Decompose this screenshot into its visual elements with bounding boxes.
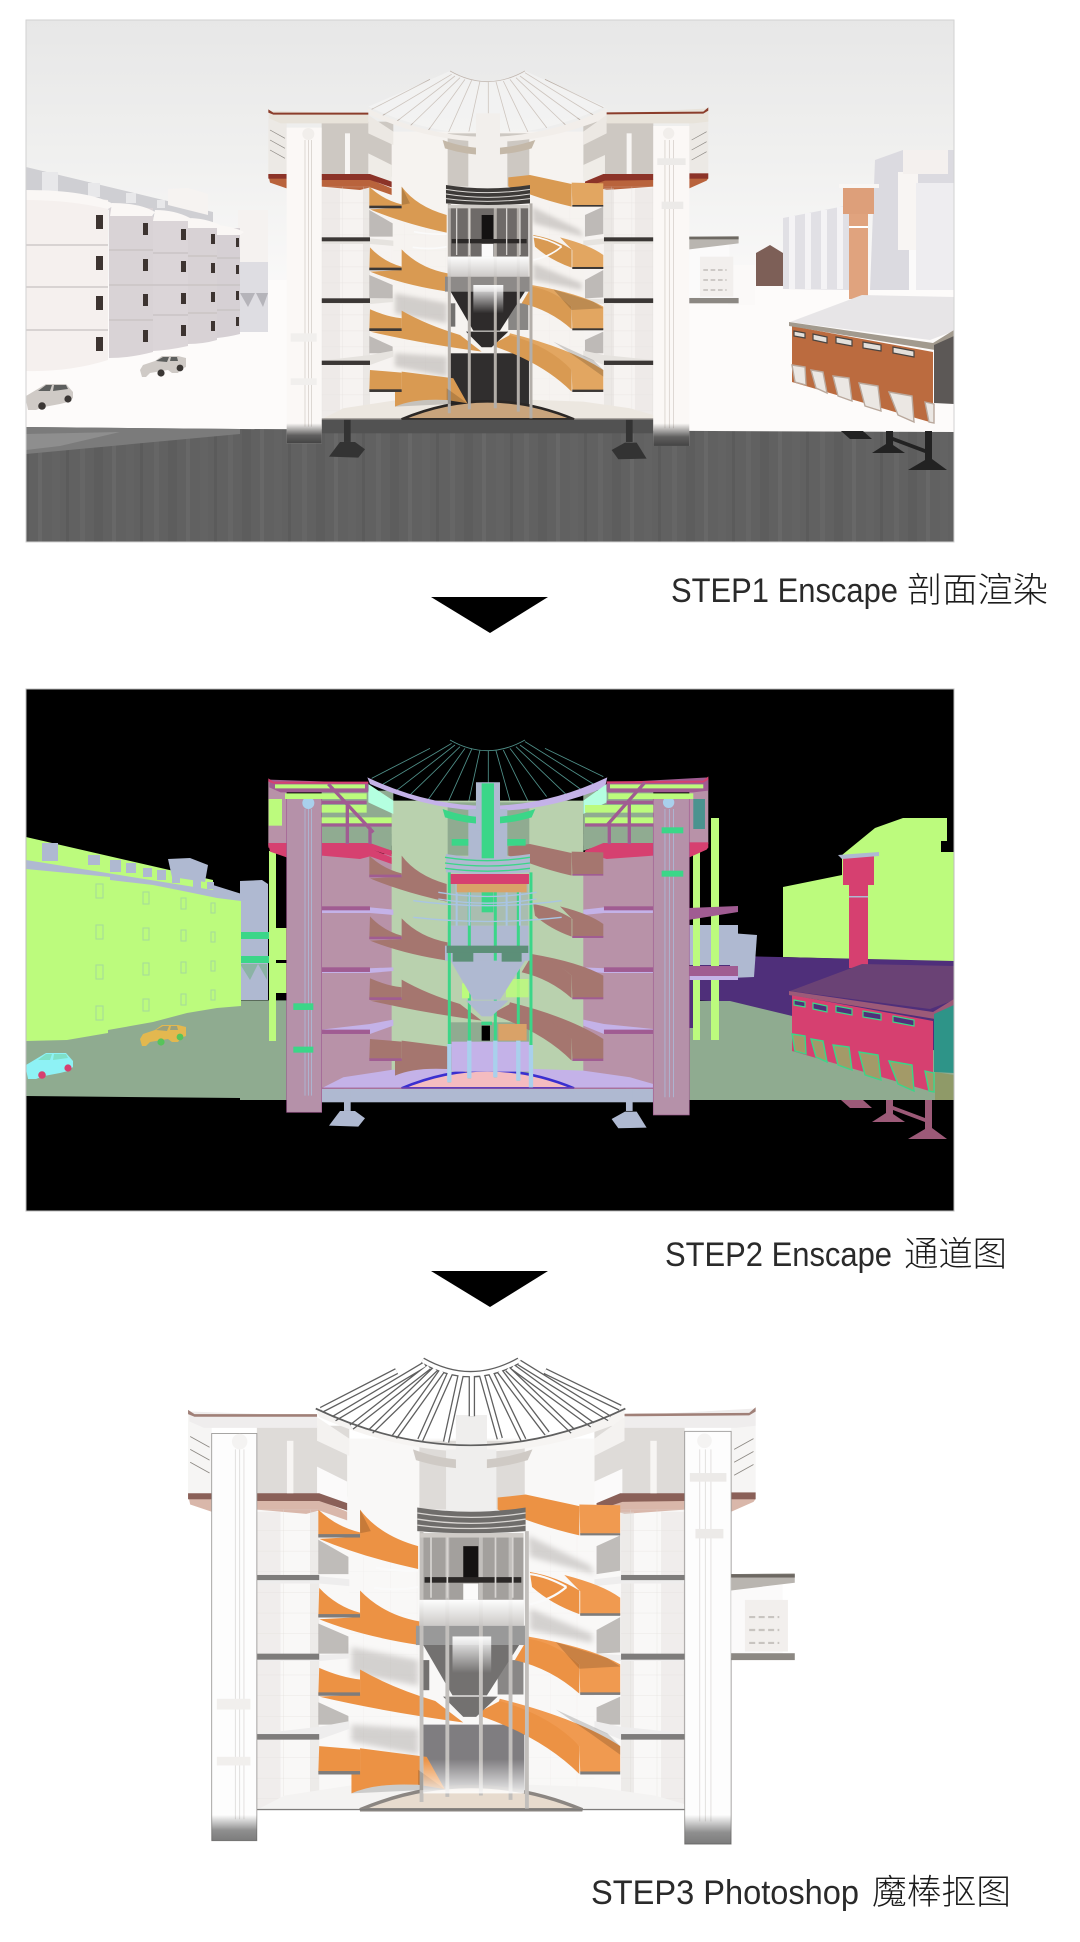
chimney [838, 852, 879, 968]
label: step 3: STEP3 Photoshop [591, 1874, 859, 1912]
main building channel map [268, 740, 708, 1128]
factory [789, 295, 954, 470]
label: step 3 [591, 1864, 1011, 1914]
panel border [26, 689, 954, 1211]
red band and hopper details [447, 874, 531, 1087]
label: step 2 [665, 1226, 1007, 1276]
panel: step 1 Enscape section render [26, 20, 954, 542]
label: step 1: 剖面渲染 [907, 562, 1048, 612]
label: step 2: STEP2 Enscape [665, 1236, 892, 1274]
core ring stripes [413, 857, 562, 926]
small building right [730, 933, 757, 978]
panel border [26, 20, 954, 542]
green shaft bars and pillar markers [293, 783, 683, 1053]
label: step 3: 魔棒抠图 [872, 1864, 1011, 1914]
label: step 1: STEP1 Enscape [671, 572, 898, 610]
panel: step 2 Enscape channel map [26, 689, 954, 1211]
sky [26, 20, 954, 210]
lower void fade [423, 1759, 524, 1793]
panel: step 3 Photoshop magic wand cut-out [188, 1360, 795, 1861]
side columns [269, 818, 738, 1041]
label: step 1 [671, 562, 1048, 612]
cars [26, 1025, 186, 1079]
underground section [26, 427, 954, 542]
dome ribs [321, 1360, 620, 1442]
purple background ground [690, 956, 954, 1050]
right lime background building [783, 818, 954, 962]
ground plane [26, 1000, 954, 1100]
roof trusses and lime stripes [269, 782, 705, 844]
label: step 2: 通道图 [904, 1226, 1007, 1276]
factory [789, 964, 954, 1139]
right background buildings and chimney [756, 150, 954, 299]
arrow: step 2 to step 3 [431, 1271, 548, 1307]
main building section [268, 71, 739, 459]
cars [26, 356, 186, 410]
arrow: step 1 to step 2 [431, 597, 548, 633]
ground [26, 280, 954, 432]
left silos in channel colours [26, 837, 269, 1041]
left silos [26, 167, 268, 371]
